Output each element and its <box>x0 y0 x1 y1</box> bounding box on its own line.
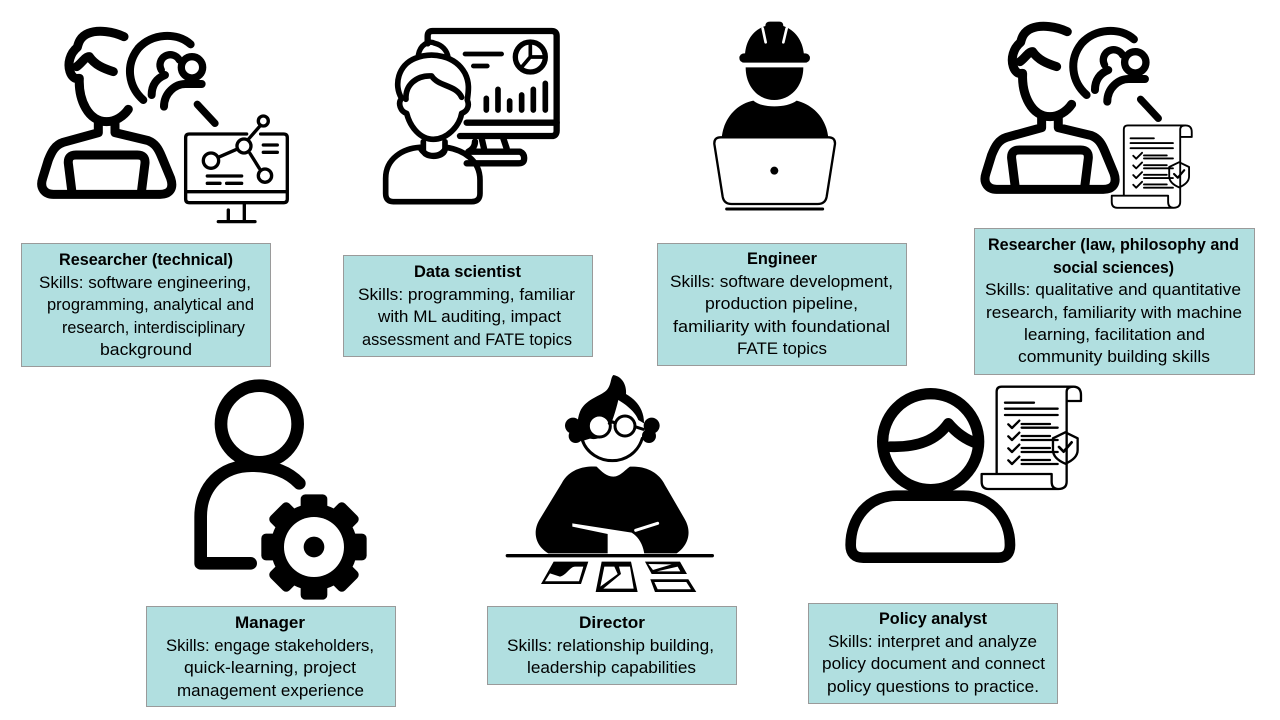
icon: policy analyst with document <box>851 387 1081 558</box>
icon: engineer with hard hat and laptop <box>714 22 835 209</box>
skills text: learning, facilitation and <box>1024 326 1205 344</box>
icon: manager with gear <box>201 386 367 600</box>
panel: engineer <box>658 244 906 366</box>
panel: data scientist <box>344 256 592 356</box>
heading: Engineer <box>747 250 818 268</box>
heading: social sciences) <box>1053 259 1174 277</box>
skills text: Skills: software development, <box>670 273 893 291</box>
skills text: policy questions to practice. <box>827 678 1039 696</box>
skills text: policy document and connect <box>822 655 1045 673</box>
skills text: Skills: software engineering, <box>39 274 251 292</box>
skills text: production pipeline, <box>705 295 858 313</box>
skills text: Skills: relationship building, <box>507 637 714 655</box>
skills text: Skills: engage stakeholders, <box>166 637 374 655</box>
skills text: management experience <box>177 682 364 700</box>
icon: data scientist with dashboard monitor <box>386 31 557 202</box>
skills text: assessment and FATE topics <box>362 331 572 349</box>
skills text <box>985 281 1242 366</box>
panel: researcher law philosophy social sciences <box>974 228 1254 374</box>
heading: Policy analyst <box>879 610 987 628</box>
heading: Data scientist <box>414 263 521 281</box>
panel: policy analyst <box>808 604 1058 704</box>
skills text <box>822 633 1045 696</box>
skills text: research, interdisciplinary <box>62 319 246 337</box>
skills text <box>358 286 576 349</box>
skills text: background <box>100 341 192 359</box>
panel: manager <box>146 606 396 706</box>
icon: law and social science researcher with policy document <box>985 26 1192 208</box>
skills text <box>507 637 714 677</box>
heading <box>988 236 1239 277</box>
heading: Researcher (law, philosophy and <box>988 236 1239 254</box>
panel: researcher technical <box>22 244 270 366</box>
icon: director with glasses at table <box>507 375 712 592</box>
skills text: with ML auditing, impact <box>377 308 561 326</box>
heading: Manager <box>235 614 306 632</box>
skills text: familiarity with foundational <box>673 318 890 336</box>
skills text <box>166 637 374 700</box>
skills text: research, familiarity with machine <box>986 304 1242 322</box>
skills text: FATE topics <box>737 340 827 358</box>
skills text: Skills: interpret and analyze <box>828 633 1037 651</box>
skills text: programming, analytical and <box>47 296 254 314</box>
panel: director <box>488 606 736 684</box>
heading: Researcher (technical) <box>59 251 233 269</box>
skills text: Skills: qualitative and quantitative <box>985 281 1241 299</box>
skills text <box>39 274 254 359</box>
heading: Director <box>579 614 646 632</box>
skills text: community building skills <box>1018 348 1210 366</box>
skills text: quick-learning, project <box>184 659 356 677</box>
icon: technical researcher with magnifier and network monitor <box>42 31 287 222</box>
skills text: Skills: programming, familiar <box>358 286 576 304</box>
skills text: leadership capabilities <box>527 659 696 677</box>
skills text <box>670 273 893 358</box>
